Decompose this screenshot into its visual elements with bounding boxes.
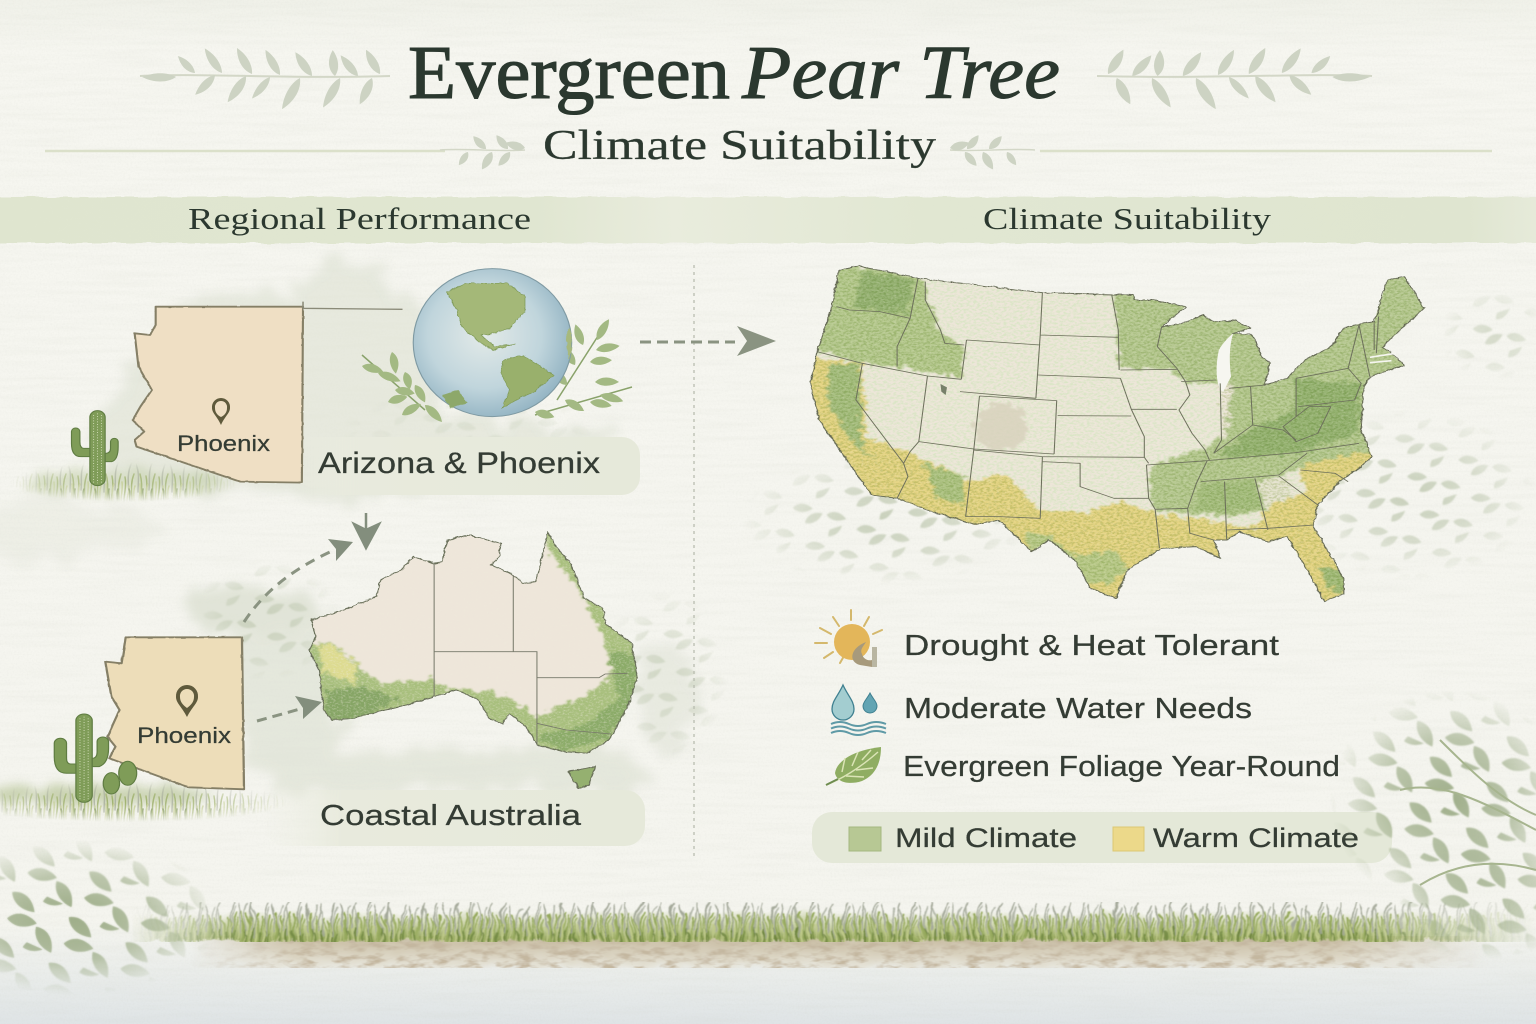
subtitle: Climate Suitability [543,123,936,169]
Mild Climate: Mild Climate [895,823,1077,853]
panel: climate suitability [802,263,1431,863]
globe sphere [413,269,572,417]
corner foliage: left [0,844,206,990]
title [408,31,1060,115]
Phoenix panel ground [0,782,290,822]
faded foliage washes [0,255,1536,790]
arrow: globe to US map [640,326,776,356]
Phoenix label, lower: Phoenix [137,723,231,748]
Arizona shrubs ground [10,462,240,502]
icon: cactus, Arizona [71,411,118,486]
icon: water drops [831,685,886,735]
icon: cactus, lower [54,714,137,802]
Drought & Heat Tolerant: Drought & Heat Tolerant [904,630,1279,662]
Coastal Australia label: Coastal Australia [320,800,582,832]
climate regions [802,263,1431,610]
Arizona label pill [290,437,640,495]
Colorado mottling [975,403,1027,450]
Phoenix pin, lower [176,685,198,717]
Arizona & Phoenix label: Arizona & Phoenix [318,447,600,480]
US climate map [802,263,1431,610]
section heading band [0,197,1536,243]
Arizona map, lower [105,637,244,789]
Phoenix label, Arizona: Phoenix [177,431,270,456]
Phoenix pin, Arizona [212,398,230,425]
Coastal Australia label pill [265,790,645,846]
panel: regional performance [0,269,776,846]
heading: Regional Performance: Regional Performance [188,201,531,236]
title branch ornament: left [140,46,390,112]
swatch: warm [1113,827,1144,851]
Tasmania [568,767,595,788]
Cape Cod detail [1370,353,1396,363]
Arizona map [133,302,403,483]
icon: sun [815,610,882,667]
globe leaves [361,317,632,425]
globe with leaves [361,269,632,425]
arrow: down [354,513,379,548]
soil strip [190,936,1490,968]
title: Evergreen [408,31,730,115]
title branch ornament: right [1097,46,1372,112]
grass [130,902,1536,942]
legend [812,812,1392,863]
Moderate Water Needs: Moderate Water Needs [904,693,1252,725]
icon: leaf [826,747,881,785]
heading: Climate Suitability: Climate Suitability [983,201,1272,236]
Lake Michigan [1217,333,1233,392]
subtitle rule and sprigs [45,133,1492,172]
Warm Climate: Warm Climate [1153,823,1359,853]
continents [443,283,572,408]
panel divider [693,265,695,856]
arrow: curved dashed to Australia [244,539,353,622]
arrow: Phoenix to Australia [257,696,322,721]
Australian state borders [434,563,628,745]
Australia map [301,523,652,790]
state borders [817,278,1379,548]
swatch: mild [849,827,881,851]
Evergreen Foliage Year-Round: Evergreen Foliage Year-Round [903,751,1340,783]
corner foliage: right [1330,690,1536,960]
title: Pear Tree [741,31,1060,115]
